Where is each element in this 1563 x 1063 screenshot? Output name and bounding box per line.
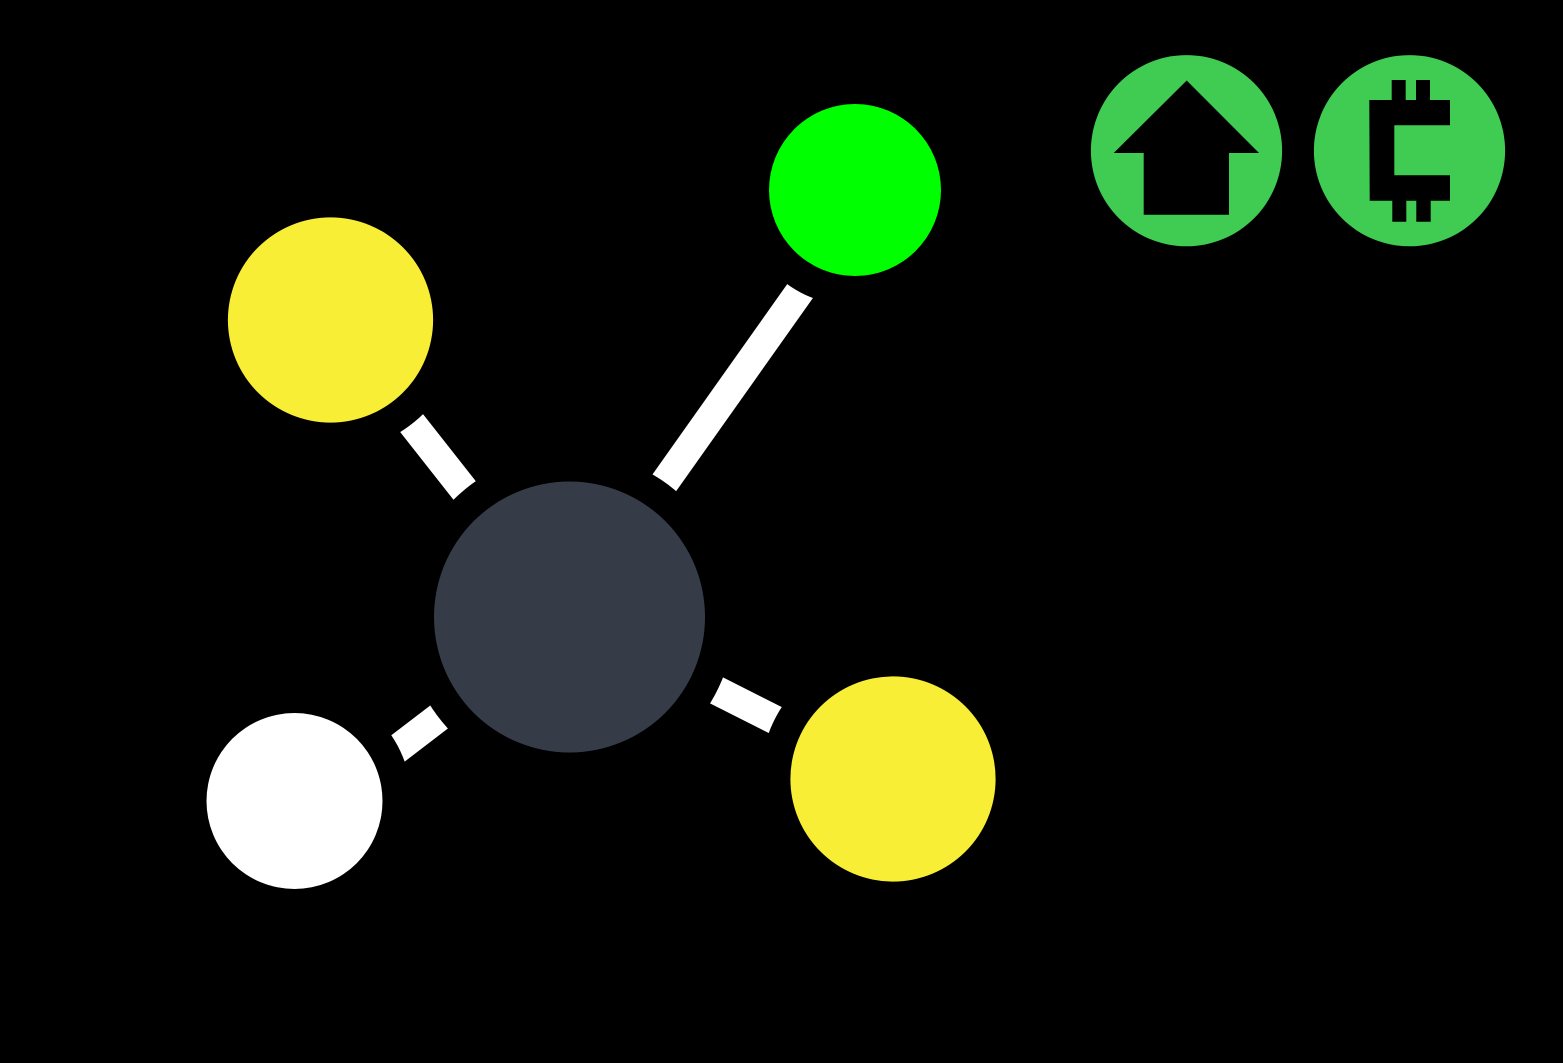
gap ring: white node xyxy=(178,684,412,918)
green node xyxy=(769,104,941,276)
upper yellow node xyxy=(228,217,433,423)
hub node xyxy=(434,482,705,752)
connector: hub to white node xyxy=(377,701,460,764)
gap ring: green node xyxy=(739,74,971,306)
connector: hub to green node xyxy=(650,270,815,503)
gap ring: lower yellow node xyxy=(760,646,1026,912)
gap ring: hub xyxy=(404,452,734,782)
connector: hub to lower yellow node xyxy=(696,680,795,730)
icon: bitcoin-style currency xyxy=(1314,55,1505,246)
white node xyxy=(206,713,382,889)
connector: hub to upper yellow node xyxy=(395,402,480,510)
icon: home xyxy=(1091,55,1282,246)
lower yellow node xyxy=(790,676,996,882)
gap ring: upper yellow node xyxy=(198,188,462,452)
